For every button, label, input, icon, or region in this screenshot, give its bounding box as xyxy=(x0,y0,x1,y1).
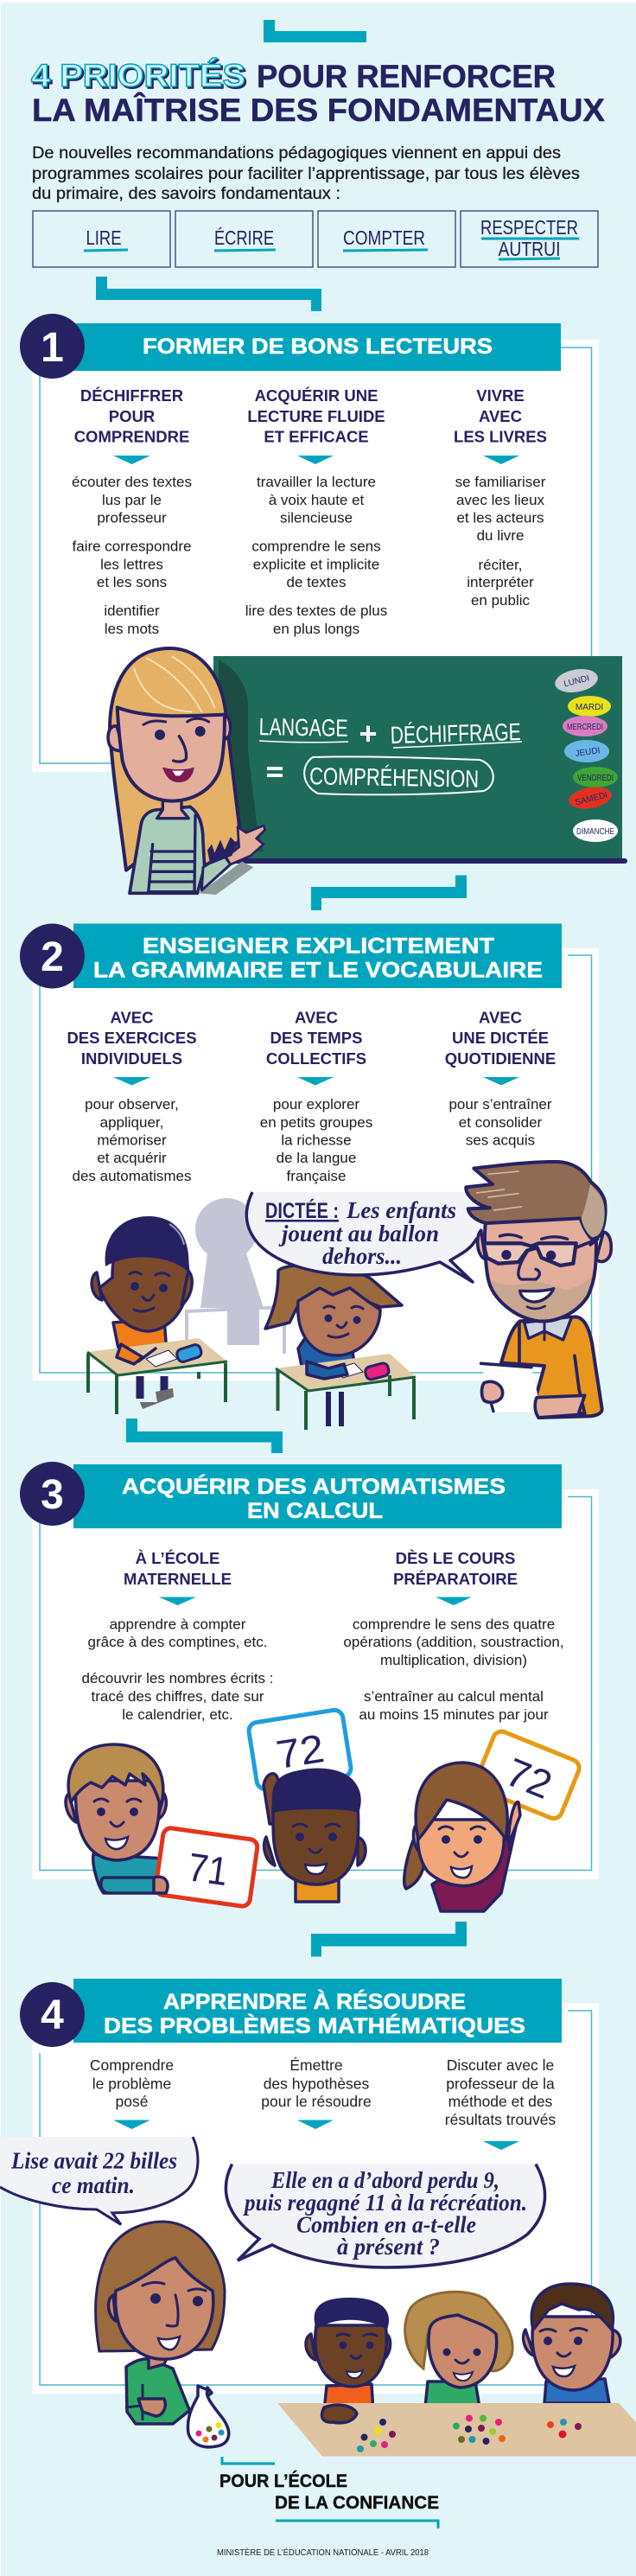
speech bubble: dictée: Les enfants xyxy=(346,1197,456,1223)
column: déchiffrer: les mots xyxy=(105,621,159,637)
column: cours préparatoire: s’entraîner au calcul mental xyxy=(364,1688,544,1705)
chalk equation xyxy=(258,713,522,794)
bracket: section 3 to section 4 xyxy=(311,1922,467,1957)
column: école maternelle xyxy=(81,1549,274,1723)
banner 4 xyxy=(73,1979,562,2043)
column: école maternelle: tracé des chiffres, date sur xyxy=(91,1688,264,1705)
illustration: teacher with glasses xyxy=(466,1162,611,1418)
title xyxy=(31,58,605,128)
box: écrire xyxy=(175,211,313,267)
four fundamentals boxes xyxy=(33,211,598,267)
column: exercices individuels xyxy=(67,1008,197,1184)
intro paragraph: programmes scolaires pour faciliter l’apprentissage, par tous les élèves xyxy=(32,165,580,183)
column: exercices individuels: et acquérir xyxy=(97,1150,167,1166)
column: discuter: résultats trouvés xyxy=(445,2111,556,2128)
column: dictée quotidienne: UNE DICTÉE xyxy=(452,1029,549,1047)
box: lire: LIRE xyxy=(86,226,121,249)
bracket: section 2 to section 3 xyxy=(126,1419,283,1453)
day labels: DIMANCHE xyxy=(576,827,614,837)
banner 1 xyxy=(73,323,561,371)
chalk equation: DÉCHIFFRAGE xyxy=(390,718,521,749)
column: exercices individuels: DES EXERCICES xyxy=(67,1029,197,1047)
column: lecture fluide: à voix haute et xyxy=(269,492,365,508)
speech bubble: dictée: DICTÉE : xyxy=(265,1198,339,1223)
column: déchiffrer: faire correspondre xyxy=(73,538,191,555)
day labels: MERCREDI xyxy=(567,723,603,732)
illustration: boy holding card 72 xyxy=(248,1709,366,1902)
column: exercices individuels: des automatismes xyxy=(73,1168,191,1184)
column: cours préparatoire: PRÉPARATOIRE xyxy=(393,1570,518,1588)
panel: section 2 xyxy=(20,923,599,1380)
illustration: boy holding card 71 xyxy=(66,1744,258,1907)
column: vivre avec les livres: avec les lieux xyxy=(456,492,545,508)
column: école maternelle: grâce à des comptines, etc. xyxy=(88,1634,267,1650)
bracket: top ornament xyxy=(264,20,366,42)
column: vivre avec les livres xyxy=(454,386,547,609)
bracket: intro to section 1 xyxy=(96,277,321,311)
box: compter xyxy=(318,211,455,267)
illustration: ghost student silhouette xyxy=(187,1198,284,1354)
banner title 2 xyxy=(93,934,543,982)
box: écrire: ÉCRIRE xyxy=(214,226,274,249)
marble bag xyxy=(188,2386,229,2447)
column: déchiffrer: professeur xyxy=(97,510,167,526)
number card 71: 71 xyxy=(185,1844,231,1894)
column: discuter xyxy=(445,2056,556,2150)
column: temps collectifs: DES TEMPS xyxy=(270,1029,362,1047)
illustration: girl holding card 72 xyxy=(404,1729,582,1911)
speech bubble: problem xyxy=(226,2165,545,2267)
box: compter: COMPTER xyxy=(343,226,425,249)
column: cours préparatoire: opérations (addition, soustraction, xyxy=(343,1634,564,1650)
speech bubble: problem: Combien en a-t-elle xyxy=(296,2211,476,2237)
speech bubble: Lise: ce matin. xyxy=(52,2172,135,2198)
column: vivre avec les livres: se familiariser xyxy=(455,474,546,490)
column: temps collectifs: pour explorer xyxy=(273,1096,359,1113)
illustration: teacher with marble bag xyxy=(96,2222,229,2447)
speech bubble: Lise: Lise avait 22 billes xyxy=(10,2147,177,2173)
panel: section 1 xyxy=(20,314,599,772)
banner title 3 xyxy=(122,1474,506,1523)
day labels: SAMEDI xyxy=(574,790,608,807)
column: vivre avec les livres: LES LIVRES xyxy=(454,427,547,446)
illustration: student at desk, centre xyxy=(265,1265,416,1430)
number badge 1 xyxy=(20,314,85,379)
column: lecture fluide: comprendre le sens xyxy=(251,538,381,555)
speech bubble: dictée: dehors... xyxy=(322,1243,402,1269)
column: lecture fluide: silencieuse xyxy=(280,510,353,526)
column: déchiffrer: lus par le xyxy=(102,492,162,508)
day labels: JEUDI xyxy=(575,746,601,759)
column: vivre avec les livres: en public xyxy=(471,592,531,609)
column: vivre avec les livres: AVEC xyxy=(479,407,522,425)
banner title 3: ACQUÉRIR DES AUTOMATISMES xyxy=(122,1474,506,1499)
number card 72 xyxy=(474,1729,582,1821)
column: déchiffrer: et les sons xyxy=(97,574,167,590)
chalk equation: LANGAGE xyxy=(258,713,348,742)
speech bubble: Lise xyxy=(0,2137,198,2225)
column: discuter: Discuter avec le xyxy=(447,2056,554,2074)
day labels: VENDREDI xyxy=(577,774,614,783)
column: déchiffrer xyxy=(72,386,192,637)
illustration: student at desk, left xyxy=(87,1216,227,1414)
number card 72: 72 xyxy=(273,1725,328,1777)
title: LA MAÎTRISE DES FONDAMENTAUX xyxy=(32,92,605,128)
table xyxy=(277,2403,636,2457)
intro paragraph xyxy=(32,144,580,203)
column: cours préparatoire: au moins 15 minutes par jour xyxy=(359,1706,549,1723)
column: exercices individuels: mémoriser xyxy=(97,1132,167,1148)
column: temps collectifs: la richesse xyxy=(281,1132,352,1148)
column: hypothèses: pour le résoudre xyxy=(261,2093,372,2110)
illustration: children around table xyxy=(277,2284,636,2457)
column: lecture fluide: travailler la lecture xyxy=(257,474,376,490)
column: dictée quotidienne xyxy=(445,1008,556,1148)
title: 4 PRIORITÉS xyxy=(33,60,247,95)
footer slogan: DE LA CONFIANCE xyxy=(275,2493,439,2513)
column: comprendre: Comprendre xyxy=(90,2056,174,2074)
column: comprendre xyxy=(90,2056,174,2129)
child 3 xyxy=(524,2284,620,2403)
speech bubble: dictée xyxy=(245,1192,484,1282)
column: cours préparatoire: DÈS LE COURS xyxy=(396,1549,515,1567)
number badge 3 xyxy=(20,1462,85,1526)
child 2 xyxy=(405,2292,512,2407)
column: vivre avec les livres: et les acteurs xyxy=(456,510,544,526)
column: vivre avec les livres: réciter, xyxy=(478,557,523,573)
column: cours préparatoire: comprendre le sens des quatre xyxy=(353,1616,555,1632)
column: école maternelle: découvrir les nombres écrits : xyxy=(81,1670,274,1687)
bracket: section 1 to section 2 xyxy=(311,875,467,910)
box: lire xyxy=(33,211,170,267)
chalk equation: COMPRÉHENSION xyxy=(309,762,479,793)
column: vivre avec les livres: VIVRE xyxy=(476,386,525,405)
speech bubble: problem: à présent ? xyxy=(337,2234,440,2260)
column: école maternelle: apprendre à compter xyxy=(110,1616,246,1632)
title: POUR RENFORCER xyxy=(257,59,556,94)
banner title 2: LA GRAMMAIRE ET LE VOCABULAIRE xyxy=(93,958,543,982)
column: exercices individuels: AVEC xyxy=(110,1008,154,1027)
column: hypothèses xyxy=(261,2056,372,2129)
column: dictée quotidienne: pour s’entraîner xyxy=(448,1096,552,1113)
banner 3 xyxy=(73,1464,562,1528)
column: exercices individuels: pour observer, xyxy=(85,1096,179,1113)
column: déchiffrer: écouter des textes xyxy=(72,474,192,490)
intro paragraph: du primaire, des savoirs fondamentaux : xyxy=(32,185,340,203)
intro paragraph: De nouvelles recommandations pédagogiques viennent en appui des xyxy=(32,144,561,163)
column: lecture fluide xyxy=(245,386,387,637)
column: déchiffrer: COMPRENDRE xyxy=(74,427,189,446)
chalk equation: + xyxy=(359,716,378,751)
box: respecter autrui: AUTRUI xyxy=(498,238,560,260)
column: dictée quotidienne: et consolider xyxy=(459,1114,543,1131)
column: lecture fluide: explicite et implicite xyxy=(253,557,379,572)
number badge 3: 3 xyxy=(41,1472,64,1518)
column: déchiffrer: POUR xyxy=(109,407,155,425)
column: lecture fluide: de textes xyxy=(287,574,346,590)
column: discuter: méthode et des xyxy=(448,2093,553,2110)
day labels xyxy=(553,666,618,842)
banner title 2: ENSEIGNER EXPLICITEMENT xyxy=(143,934,494,958)
footer credit: MINISTÈRE DE L’ÉDUCATION NATIONALE - AVRIL 2018 xyxy=(217,2547,429,2558)
column: hypothèses: Émettre xyxy=(289,2056,343,2074)
footer slogan: POUR L’ÉCOLE xyxy=(219,2471,347,2491)
column: cours préparatoire xyxy=(343,1549,564,1723)
speech bubble: problem: Elle en a d’abord perdu 9, xyxy=(270,2167,499,2193)
column: école maternelle: le calendrier, etc. xyxy=(122,1706,233,1723)
column: dictée quotidienne: QUOTIDIENNE xyxy=(445,1049,556,1068)
banner title 4: APPRENDRE À RÉSOUDRE xyxy=(163,1989,466,2014)
box: respecter autrui: RESPECTER xyxy=(480,216,578,239)
banner 2 xyxy=(73,923,562,988)
day labels: MARDI xyxy=(576,703,603,712)
column: lecture fluide: lire des textes de plus xyxy=(245,603,387,619)
column: vivre avec les livres: interpréter xyxy=(467,574,534,590)
banner title 4: DES PROBLÈMES MATHÉMATIQUES xyxy=(104,2013,525,2038)
speech bubble: problem: puis regagné 11 à la récréation. xyxy=(243,2190,527,2216)
title: 4 PRIORITÉS xyxy=(31,58,245,93)
number badge 1: 1 xyxy=(41,325,64,371)
banner title 1: FORMER DE BONS LECTEURS xyxy=(143,335,493,359)
column: école maternelle: À L’ÉCOLE xyxy=(136,1549,219,1567)
column: temps collectifs: COLLECTIFS xyxy=(266,1049,366,1068)
number badge 2: 2 xyxy=(41,934,64,980)
column: lecture fluide: ACQUÉRIR UNE xyxy=(255,386,378,405)
column: temps collectifs: AVEC xyxy=(295,1008,338,1027)
column: dictée quotidienne: AVEC xyxy=(479,1008,522,1027)
number card 71 xyxy=(155,1827,258,1907)
column: déchiffrer: les lettres xyxy=(100,557,163,572)
column: comprendre: posé xyxy=(116,2093,148,2110)
day labels: LUNDI xyxy=(563,673,590,689)
column: déchiffrer: identifier xyxy=(104,603,160,619)
column: vivre avec les livres: du livre xyxy=(477,527,524,544)
child 1 xyxy=(306,2298,391,2412)
box: respecter autrui xyxy=(461,211,598,267)
number card 72 xyxy=(248,1709,352,1790)
column: comprendre: le problème xyxy=(92,2075,171,2092)
column: lecture fluide: ET EFFICACE xyxy=(264,427,369,446)
column: cours préparatoire: multiplication, division) xyxy=(380,1652,527,1668)
chalkboard xyxy=(213,656,625,861)
column: exercices individuels: INDIVIDUELS xyxy=(81,1049,182,1068)
column: temps collectifs: en petits groupes xyxy=(260,1114,372,1131)
marbles xyxy=(357,2415,582,2452)
illustration: blonde teacher xyxy=(108,648,265,895)
column: lecture fluide: en plus longs xyxy=(273,621,359,637)
column: lecture fluide: LECTURE FLUIDE xyxy=(247,407,385,425)
panel: section 4 xyxy=(20,1979,599,2394)
column: temps collectifs: de la langue xyxy=(277,1150,356,1166)
column: temps collectifs: française xyxy=(287,1168,346,1184)
banner title 4 xyxy=(104,1989,525,2038)
column: discuter: professeur de la xyxy=(446,2075,555,2092)
panel: section 3 xyxy=(20,1462,599,1879)
banner title 3: EN CALCUL xyxy=(247,1499,383,1523)
footer slogan xyxy=(219,2457,439,2528)
number badge 2 xyxy=(20,923,85,989)
speech bubble: dictée: jouent au ballon xyxy=(278,1221,439,1247)
number card 72: 72 xyxy=(499,1749,558,1808)
number badge 4 xyxy=(20,1982,85,2047)
column: hypothèses: des hypothèses xyxy=(264,2075,370,2092)
column: exercices individuels: appliquer, xyxy=(100,1114,163,1131)
column: école maternelle: MATERNELLE xyxy=(124,1570,232,1588)
column: dictée quotidienne: ses acquis xyxy=(466,1132,535,1148)
number badge 4: 4 xyxy=(41,1993,64,2038)
column: temps collectifs xyxy=(260,1008,372,1184)
column: déchiffrer: DÉCHIFFRER xyxy=(80,386,183,405)
